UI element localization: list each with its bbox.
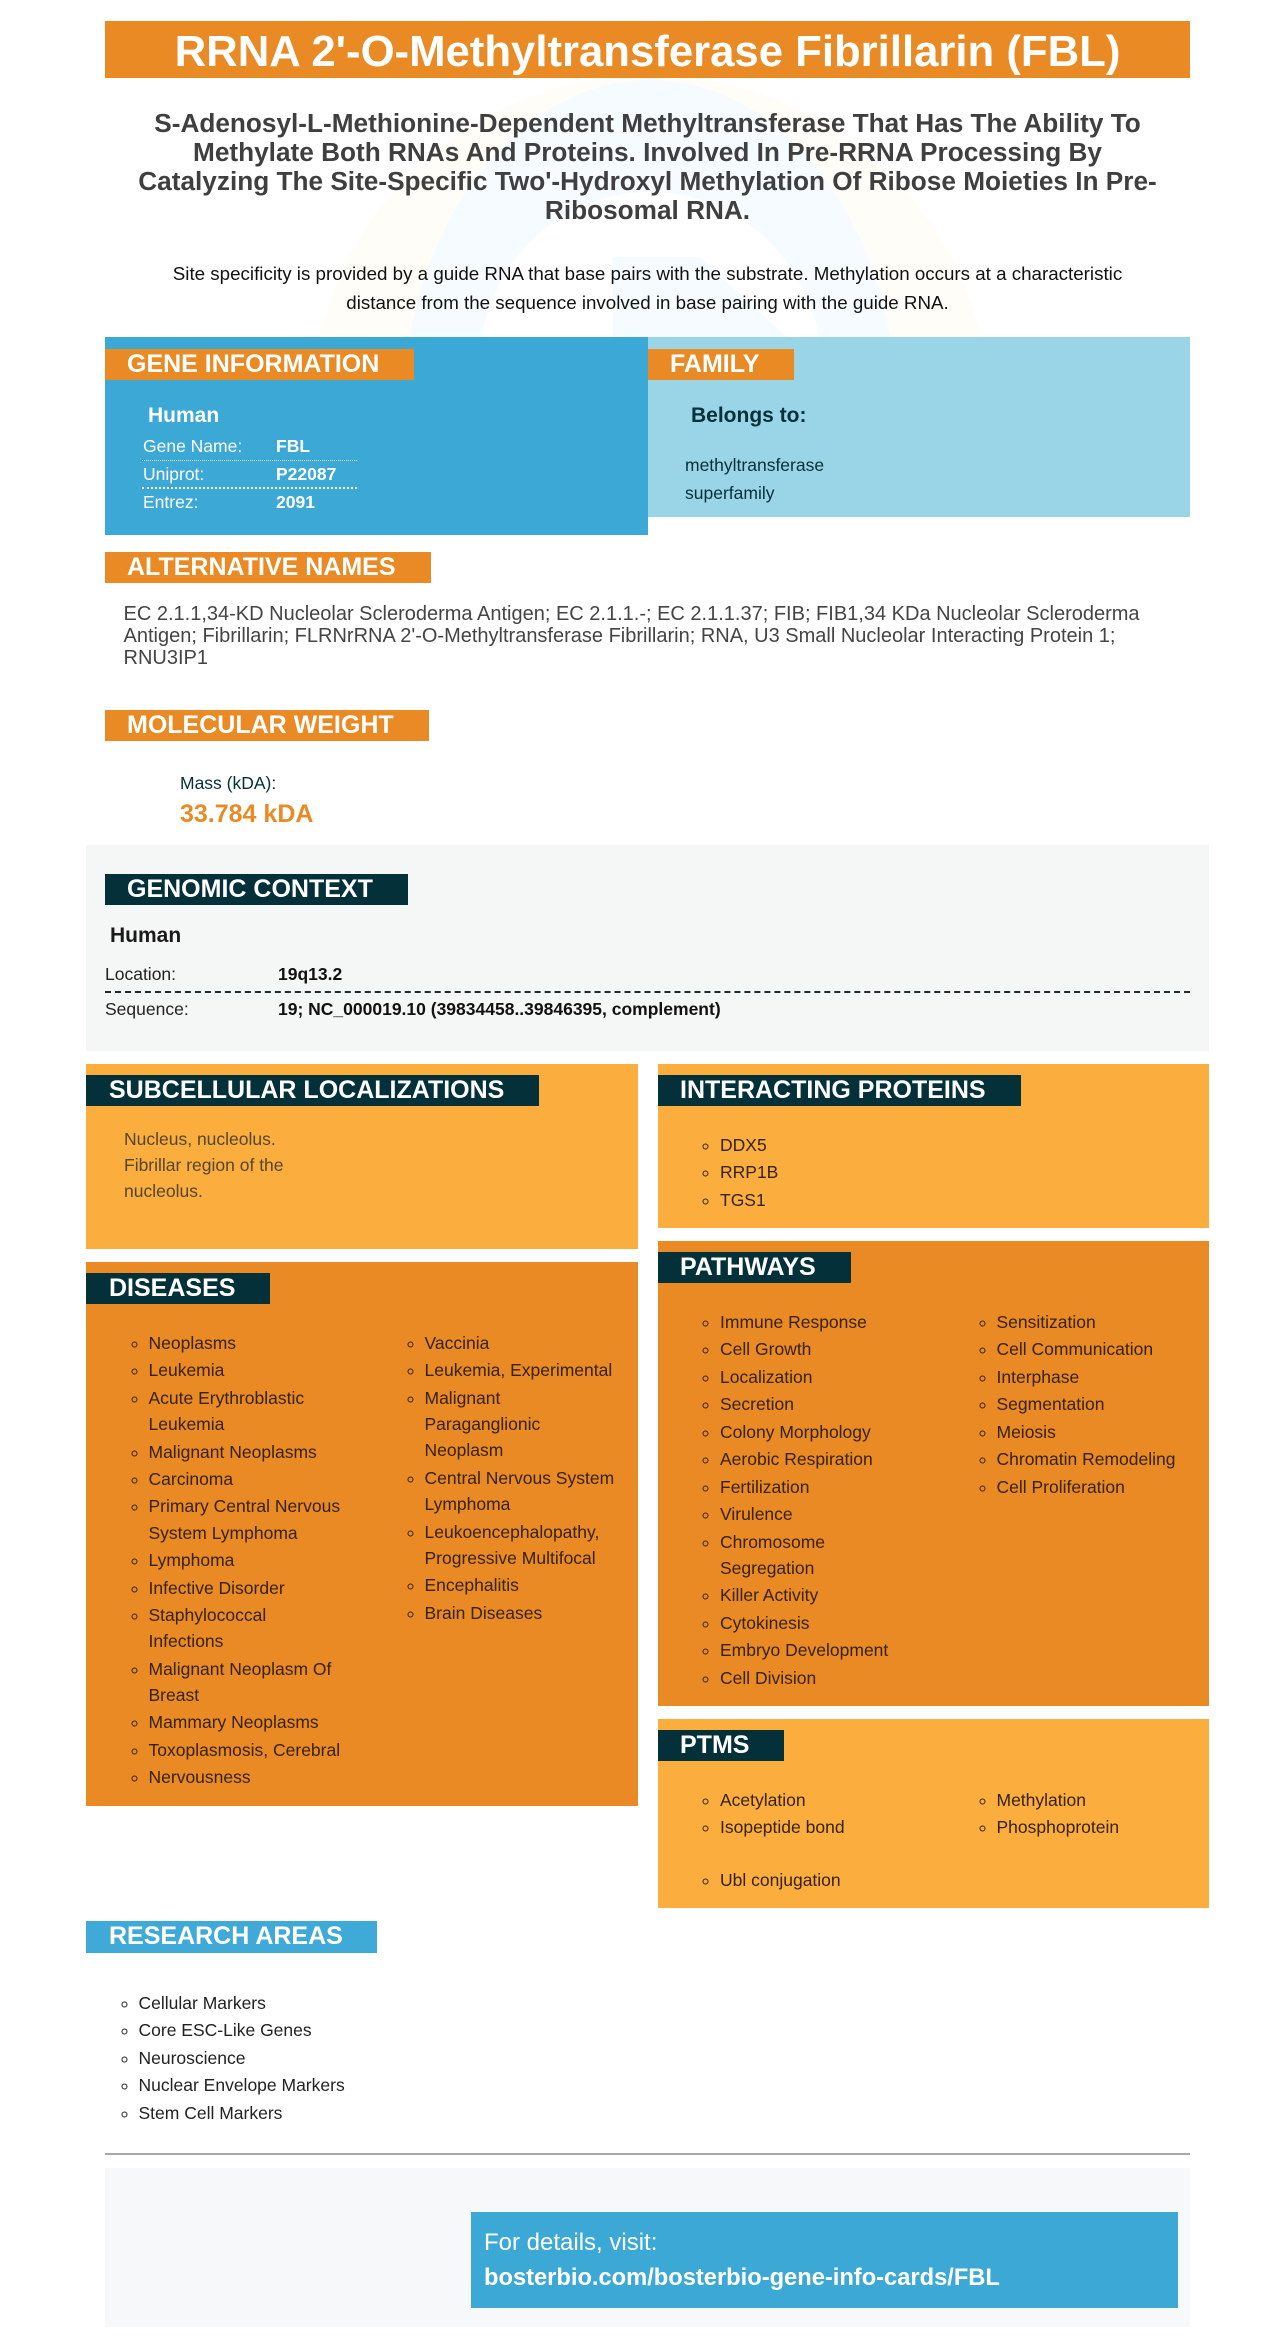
diseases list column 2: Brain Diseases bbox=[424, 1603, 542, 1623]
heading: interacting proteins: INTERACTING PROTEINS bbox=[680, 1076, 986, 1104]
ptms list column 1: Acetylation bbox=[720, 1790, 806, 1810]
pathways list column 1: Aerobic Respiration bbox=[720, 1449, 873, 1469]
heading: molecular weight: MOLECULAR WEIGHT bbox=[127, 711, 394, 739]
diseases list column 2 bbox=[408, 1333, 614, 1623]
heading: family bbox=[648, 348, 794, 380]
description paragraph: distance from the sequence involved in base pairing with the guide RNA. bbox=[346, 292, 949, 312]
pathways list column 2: Chromatin Remodeling bbox=[996, 1449, 1175, 1469]
pathways list column 1: Fertilization bbox=[720, 1477, 809, 1497]
entrez row bbox=[143, 492, 315, 512]
diseases list column 1: Acute Erythroblastic bbox=[148, 1388, 304, 1408]
ptms list column 1: Ubl conjugation bbox=[720, 1870, 841, 1890]
diseases list column 1: Nervousness bbox=[148, 1767, 251, 1787]
sequence row bbox=[105, 999, 721, 1019]
pathways list column 1: Chromosome bbox=[720, 1532, 825, 1552]
interacting proteins list: TGS1 bbox=[720, 1190, 766, 1210]
diseases list column 2: Central Nervous System bbox=[424, 1468, 614, 1488]
pathways list column 2: Segmentation bbox=[996, 1394, 1104, 1414]
description paragraph bbox=[173, 263, 1122, 313]
uniprot row: P22087 bbox=[276, 464, 336, 484]
ptms list column 1: Isopeptide bond bbox=[720, 1817, 845, 1837]
diseases list column 1 bbox=[132, 1333, 340, 1787]
interacting proteins list bbox=[702, 1135, 778, 1210]
location row: Location: bbox=[105, 964, 176, 984]
title banner: RRNA 2'-O-Methyltransferase Fibrillarin (FBL) bbox=[175, 27, 1120, 76]
diseases list column 2: Malignant bbox=[424, 1388, 500, 1408]
research areas list: Neuroscience bbox=[138, 2048, 246, 2068]
callout: details link: bosterbio.com/bosterbio-gene-info-cards/FBL bbox=[484, 2265, 1000, 2291]
pathways list column 1: Localization bbox=[720, 1367, 812, 1387]
diseases list column 1: Malignant Neoplasms bbox=[148, 1442, 317, 1462]
interacting proteins list: DDX5 bbox=[720, 1135, 767, 1155]
subcellular text: Nucleus, nucleolus. bbox=[124, 1129, 276, 1149]
diseases list column 1: Breast bbox=[148, 1685, 199, 1705]
heading: diseases bbox=[86, 1273, 270, 1304]
pathways list column 1 bbox=[702, 1312, 888, 1688]
diseases list column 1: Leukemia bbox=[148, 1414, 224, 1434]
alternative names text bbox=[124, 603, 1140, 669]
uniprot row bbox=[143, 464, 336, 484]
heading: ptms: PTMS bbox=[680, 1731, 749, 1759]
panel: footer bbox=[105, 2168, 1190, 2327]
research areas list bbox=[122, 1993, 345, 2123]
pathways list column 2: Sensitization bbox=[996, 1312, 1096, 1332]
panel: interacting proteins bbox=[658, 1064, 1209, 1228]
diseases list column 2: Vaccinia bbox=[424, 1333, 489, 1353]
diseases list column 2: Encephalitis bbox=[424, 1575, 519, 1595]
heading: subcellular localizations: SUBCELLULAR LOCALIZATIONS bbox=[109, 1076, 504, 1104]
pathways list column 1: Colony Morphology bbox=[720, 1422, 871, 1442]
heading: diseases: DISEASES bbox=[109, 1274, 235, 1302]
ptms list column 1 bbox=[702, 1790, 845, 1890]
pathways list column 2: Meiosis bbox=[996, 1422, 1056, 1442]
genomic species: human: Human bbox=[110, 924, 181, 947]
heading: genomic context: GENOMIC CONTEXT bbox=[127, 875, 373, 903]
heading: family: FAMILY bbox=[670, 350, 759, 378]
diseases list column 2: Paraganglionic bbox=[424, 1414, 540, 1434]
pathways list column 1: Killer Activity bbox=[720, 1585, 818, 1605]
research areas list: Nuclear Envelope Markers bbox=[138, 2075, 345, 2095]
family value bbox=[685, 455, 824, 503]
location row bbox=[105, 964, 342, 984]
pathways list column 2: Cell Proliferation bbox=[996, 1477, 1125, 1497]
mass value: 33.784 kDA bbox=[180, 800, 313, 828]
diseases list column 1: Primary Central Nervous bbox=[148, 1496, 340, 1516]
alternative names text: RNU3IP1 bbox=[124, 647, 208, 669]
diseases list column 2: Leukoencephalopathy, bbox=[424, 1522, 599, 1542]
subtitle: Ribosomal RNA. bbox=[545, 195, 750, 225]
diseases list column 1: Toxoplasmosis, Cerebral bbox=[148, 1740, 340, 1760]
pathways list column 1: Virulence bbox=[720, 1504, 793, 1524]
uniprot row: Uniprot: bbox=[143, 464, 204, 484]
entrez row: 2091 bbox=[276, 492, 315, 512]
diseases list column 1: Lymphoma bbox=[148, 1550, 234, 1570]
pathways list column 2: Interphase bbox=[996, 1367, 1079, 1387]
pathways list column 1: Cell Division bbox=[720, 1668, 816, 1688]
subtitle: S-Adenosyl-L-Methionine-Dependent Methyltransferase That Has The Ability To bbox=[154, 108, 1141, 138]
mass label: Mass (kDA): bbox=[180, 773, 276, 793]
diseases list column 2: Leukemia, Experimental bbox=[424, 1360, 612, 1380]
pathways list column 1: Cytokinesis bbox=[720, 1613, 809, 1633]
pathways list column 1: Embryo Development bbox=[720, 1640, 888, 1660]
background watermark logo bbox=[410, 80, 890, 337]
ptms list column 2 bbox=[980, 1790, 1119, 1837]
diseases list column 1: Infective Disorder bbox=[148, 1578, 285, 1598]
text: 19; NC_000019.10 (39834458..39846395, complement) bbox=[278, 999, 721, 1019]
panel: subcellular localizations bbox=[86, 1064, 638, 1249]
diseases list column 1: Malignant Neoplasm Of bbox=[148, 1659, 331, 1679]
sequence row: Sequence: bbox=[105, 999, 189, 1019]
ptms list column 2: Methylation bbox=[996, 1790, 1086, 1810]
pathways list column 2: Cell Communication bbox=[996, 1339, 1153, 1359]
diseases list column 1: System Lymphoma bbox=[148, 1523, 298, 1543]
entrez row: Entrez: bbox=[143, 492, 198, 512]
gene species: human: Human bbox=[148, 404, 219, 427]
heading: pathways bbox=[658, 1252, 851, 1283]
heading: pathways: PATHWAYS bbox=[680, 1253, 816, 1281]
diseases list column 2: Lymphoma bbox=[424, 1494, 510, 1514]
heading: alternative names: ALTERNATIVE NAMES bbox=[127, 553, 396, 581]
description paragraph: Site specificity is provided by a guide RNA that base pairs with the substrate. Methylation occurs at a characteristic bbox=[173, 263, 1122, 284]
subtitle bbox=[138, 108, 1157, 225]
panel: family bbox=[648, 337, 1190, 516]
interacting proteins list: RRP1B bbox=[720, 1162, 778, 1182]
diseases list column 2: Neoplasm bbox=[424, 1440, 503, 1460]
diseases list column 1: Staphylococcal bbox=[148, 1605, 266, 1625]
pathways list column 1: Cell Growth bbox=[720, 1339, 811, 1359]
pathways list column 2 bbox=[980, 1312, 1175, 1497]
pathways list column 1: Secretion bbox=[720, 1394, 794, 1414]
subtitle: Catalyzing The Site-Specific Two'-Hydroxyl Methylation Of Ribose Moieties In Pre- bbox=[138, 166, 1157, 196]
diseases list column 2: Progressive Multifocal bbox=[424, 1548, 596, 1568]
research areas list: Stem Cell Markers bbox=[138, 2103, 282, 2123]
diseases list column 1: Carcinoma bbox=[148, 1469, 233, 1489]
research areas list: Core ESC-Like Genes bbox=[138, 2020, 312, 2040]
subtitle: Methylate Both RNAs And Proteins. Involved In Pre-RRNA Processing By bbox=[193, 137, 1102, 167]
belongs to label: Belongs to: bbox=[691, 404, 806, 427]
diseases list column 1: Neoplasms bbox=[148, 1333, 236, 1353]
family value: methyltransferase bbox=[685, 455, 824, 475]
heading: gene information: GENE INFORMATION bbox=[127, 350, 379, 378]
diseases list column 1: Mammary Neoplasms bbox=[148, 1712, 319, 1732]
pathways list column 1: Segregation bbox=[720, 1558, 814, 1578]
heading: ptms bbox=[658, 1730, 784, 1761]
panel: ptms bbox=[658, 1719, 1209, 1908]
research areas list: Cellular Markers bbox=[138, 1993, 266, 2013]
heading: research areas: RESEARCH AREAS bbox=[109, 1922, 343, 1950]
subcellular text: nucleolus. bbox=[124, 1181, 203, 1201]
alternative names text: Antigen; Fibrillarin; FLRNrRNA 2'-O-Methyltransferase Fibrillarin; RNA, U3 Small Nucleolar Interacting Protein 1; bbox=[124, 625, 1115, 647]
ptms list column 2: Phosphoprotein bbox=[996, 1817, 1119, 1837]
gene name row: FBL bbox=[276, 436, 310, 456]
subcellular text: Fibrillar region of the bbox=[124, 1155, 284, 1175]
panel: genomic context bbox=[86, 845, 1209, 1051]
gene name row: Gene Name: bbox=[143, 436, 242, 456]
panel: gene information bbox=[105, 337, 648, 534]
gene name row bbox=[143, 436, 310, 456]
subcellular text bbox=[124, 1129, 284, 1201]
callout: details link bbox=[471, 2212, 1178, 2308]
family value: superfamily bbox=[685, 483, 774, 503]
panel: pathways bbox=[658, 1241, 1209, 1706]
text: 19q13.2 bbox=[278, 964, 342, 984]
pathways list column 1: Immune Response bbox=[720, 1312, 867, 1332]
diseases list column 1: Infections bbox=[148, 1631, 223, 1651]
alternative names text: EC 2.1.1,34-KD Nucleolar Scleroderma Antigen; EC 2.1.1.-; EC 2.1.1.37; FIB; FIB1,34 KDa Nucleolar Scleroderma bbox=[124, 603, 1140, 625]
panel: diseases bbox=[86, 1262, 638, 1806]
diseases list column 1: Leukemia bbox=[148, 1360, 224, 1380]
callout: details link: For details, visit: bbox=[484, 2229, 657, 2256]
